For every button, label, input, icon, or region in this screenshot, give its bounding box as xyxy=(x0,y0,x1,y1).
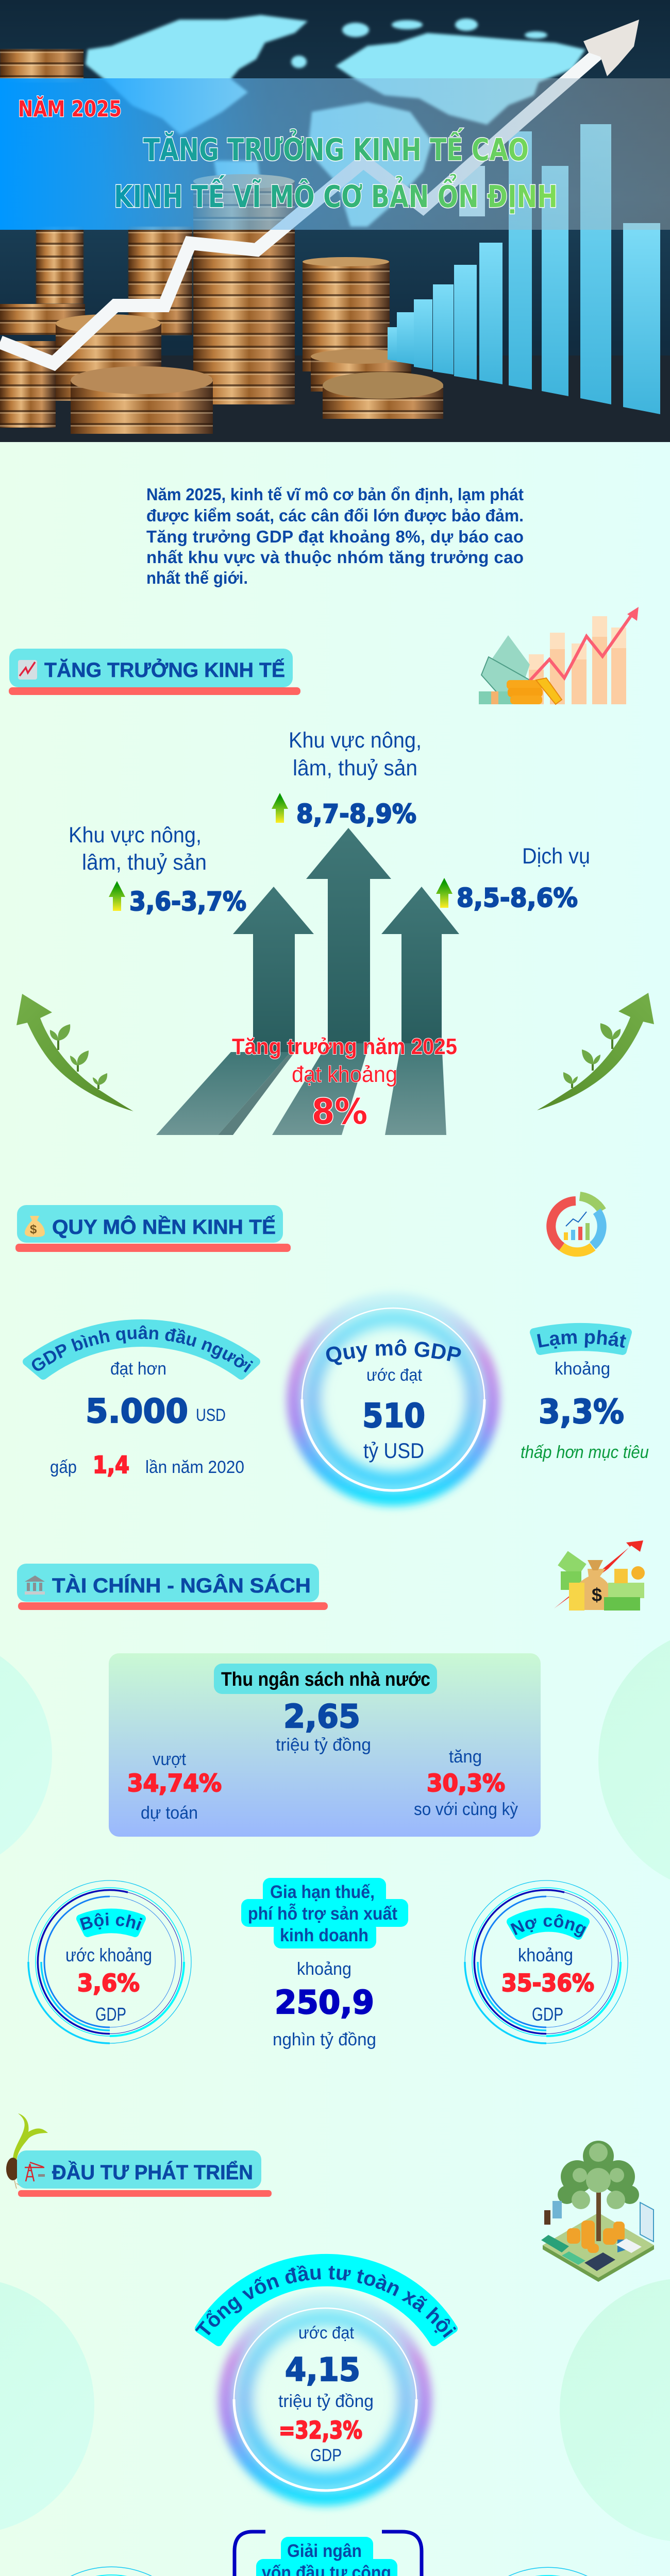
panel: public debt ring xyxy=(464,1880,628,2044)
icon: chart emoji xyxy=(18,660,37,680)
panel: state budget revenue: vượt xyxy=(153,1750,186,1769)
panel: total social investment: ước đạt xyxy=(298,2323,354,2342)
panel: state budget revenue: so với cùng kỳ xyxy=(414,1800,518,1819)
panel: state budget revenue: 2,65 xyxy=(283,1698,360,1735)
intro text: nhất khu vực và thuộc nhóm tăng trưởng cao xyxy=(146,548,524,567)
panel: GDP scale circle: ước đạt xyxy=(366,1365,422,1384)
label: left sector: lâm, thuỷ sản xyxy=(82,850,207,875)
panel: public investment disbursement xyxy=(234,2532,422,2576)
panel: public debt ring: GDP xyxy=(532,2004,563,2025)
growth 2025 callout: 8% xyxy=(312,1092,367,1132)
growth 2025 callout xyxy=(232,1034,457,1132)
panel: budget deficit ring xyxy=(27,1880,192,2044)
labels: agriculture, top arrow value xyxy=(289,728,422,781)
value: 8,5-8,6%: 8,5-8,6% xyxy=(457,883,578,913)
panel: budget deficit ring: GDP xyxy=(95,2004,126,2025)
panel: FDI attracted ring xyxy=(71,2567,152,2576)
growth 2025 callout: Tăng trưởng năm 2025 xyxy=(232,1034,457,1059)
intro text: Năm 2025, kinh tế vĩ mô cơ bản ổn định, lạm phát xyxy=(146,485,524,504)
intro text: nhất thế giới. xyxy=(146,568,248,587)
panel: budget deficit ring: Bội chi xyxy=(79,1912,142,1930)
panel: total social investment xyxy=(195,2253,458,2513)
hero image: coins, bars, world map and arrow xyxy=(0,0,670,442)
pill: budget title xyxy=(214,1664,437,1694)
panel: budget deficit ring: 3,6% xyxy=(77,1969,140,1997)
panel: total social investment: Tổng vốn đầu tư toàn xã hội xyxy=(195,2265,457,2338)
panel: GDP scale circle: 510 xyxy=(362,1397,425,1435)
decorative side shape: right xyxy=(560,2278,670,2542)
panel: state budget revenue xyxy=(109,1653,541,1837)
panel: GDP scale circle xyxy=(281,1291,506,1513)
illustration: money tree xyxy=(541,2141,654,2282)
value: 3,6-3,7% xyxy=(109,881,246,917)
icon: crane xyxy=(25,2162,45,2181)
panel: FDI realised ring xyxy=(508,2567,588,2576)
panel: GDP per capita: 5.000 xyxy=(86,1393,188,1431)
panel: tax deferral: nghìn tỷ đồng xyxy=(273,2030,376,2049)
section header: Tăng trưởng kinh tế: TĂNG TRƯỞNG KINH TẾ xyxy=(44,658,285,682)
intro text: Tăng trưởng GDP đạt khoảng 8%, dự báo cao xyxy=(146,527,524,546)
panel: state budget revenue: 30,3% xyxy=(427,1769,505,1797)
panel: GDP per capita: lần năm 2020 xyxy=(145,1458,244,1477)
value: 8,7-8,9%: 8,7-8,9% xyxy=(296,799,416,829)
hero title band xyxy=(0,78,670,230)
panel: total social investment: =32,3% xyxy=(279,2416,362,2444)
panel: tax deferral: phí hỗ trợ sản xuất xyxy=(248,1903,397,1924)
panel: state budget revenue: dự toán xyxy=(141,1803,198,1823)
panel: tax deferral: kinh doanh xyxy=(280,1925,368,1945)
intro text: được kiểm soát, các cân đối lớn được bảo đảm. xyxy=(146,506,524,525)
panel: public debt ring: 35-36% xyxy=(501,1969,594,1997)
year label: NĂM 2025 xyxy=(18,96,122,122)
rising arrow xyxy=(0,20,639,363)
intro text xyxy=(146,485,524,587)
panel: inflation: Lạm phát xyxy=(537,1330,626,1349)
panel: public debt ring: Nợ công xyxy=(510,1914,587,1937)
main title xyxy=(114,128,558,214)
icon: money bag: $ xyxy=(30,1223,37,1236)
growth 2025 callout: đạt khoảng xyxy=(292,1062,397,1087)
main title: TĂNG TRƯỞNG KINH TẾ CAO xyxy=(143,128,529,167)
section header: Tài chính - Ngân sách xyxy=(17,1564,328,1610)
icon: money bag with coins: $ xyxy=(592,1584,602,1605)
decorative side shape: left xyxy=(0,1635,52,1875)
coin stacks xyxy=(0,49,443,434)
panel: GDP per capita: 1,4 xyxy=(93,1451,129,1479)
pill: GDP bình quân xyxy=(27,1324,256,1376)
icon: donut chart xyxy=(551,1196,602,1252)
labels: agriculture, top arrow value: Khu vực nông, xyxy=(289,728,422,753)
labels: agriculture, top arrow value: lâm, thuỷ sản xyxy=(293,756,417,781)
label: left sector xyxy=(69,823,207,875)
panel: GDP per capita: gấp xyxy=(50,1458,77,1477)
panel: budget deficit ring: ước khoảng xyxy=(65,1944,152,1965)
icon: left green arrow xyxy=(16,994,133,1111)
panel: inflation: 3,3% xyxy=(539,1393,624,1431)
panel: GDP per capita xyxy=(23,1319,260,1479)
label: left sector: Khu vực nông, xyxy=(69,823,202,848)
decorative side shape: right xyxy=(598,1628,670,1892)
label: services: Dịch vụ xyxy=(522,844,590,869)
section header: Đầu tư phát triển: ĐẦU TƯ PHÁT TRIỂN xyxy=(52,2160,253,2184)
icon: bank xyxy=(25,1575,45,1595)
panel: state budget revenue: triệu tỷ đồng xyxy=(276,1735,371,1755)
three growth arrows xyxy=(156,828,459,1135)
panel: public debt ring: khoảng xyxy=(518,1944,573,1965)
panel: total social investment: 4,15 xyxy=(285,2351,360,2388)
value: 8,7-8,9% xyxy=(272,793,416,829)
decorative side shape: left xyxy=(0,2278,94,2534)
panel: GDP scale circle: tỷ USD xyxy=(363,1438,424,1463)
value: 3,6-3,7%: 3,6-3,7% xyxy=(129,887,246,917)
section header: Tài chính - Ngân sách: TÀI CHÍNH - NGÂN SÁCH xyxy=(52,1573,311,1597)
icon: sprout behind investment header xyxy=(6,2113,48,2189)
panel: inflation: khoảng xyxy=(555,1359,610,1379)
panel: state budget revenue: tăng xyxy=(449,1747,482,1767)
main title: KINH TẾ VĨ MÔ CƠ BẢN ỔN ĐỊNH xyxy=(114,174,558,214)
bars xyxy=(388,124,660,414)
panel: state budget revenue: 34,74% xyxy=(127,1769,222,1797)
panel: tax deferral: Gia hạn thuế, xyxy=(270,1882,375,1902)
icon: right green arrow xyxy=(537,993,654,1110)
panel: GDP per capita: GDP bình quân đầu người xyxy=(32,1325,254,1372)
panel: total social investment: triệu tỷ đồng xyxy=(278,2392,374,2411)
section header: Đầu tư phát triển xyxy=(17,2150,272,2197)
panel: GDP scale circle: Quy mô GDP xyxy=(326,1340,461,1365)
panel: public investment disbursement: Giải ngân xyxy=(287,2541,362,2561)
panel: tax deferral: 250,9 xyxy=(275,1984,374,2021)
icon: money bag xyxy=(25,1216,45,1237)
illustration: money and rising bars xyxy=(479,607,639,704)
section header: Quy mô nền kinh tế xyxy=(15,1205,291,1252)
icon: money bag with coins xyxy=(554,1540,645,1611)
panel: total social investment: GDP xyxy=(310,2446,342,2465)
panel: GDP per capita: đạt hơn xyxy=(110,1359,166,1379)
panel: tax deferral: khoảng xyxy=(297,1959,351,1979)
panel: state budget revenue: Thu ngân sách nhà nước xyxy=(221,1669,430,1690)
panel: GDP per capita: USD xyxy=(196,1405,226,1425)
section header: Tăng trưởng kinh tế xyxy=(9,649,300,695)
section header: Quy mô nền kinh tế: QUY MÔ NỀN KINH TẾ xyxy=(52,1215,276,1239)
panel: inflation: thấp hơn mục tiêu xyxy=(521,1443,649,1462)
panel: tax deferral xyxy=(241,1878,408,2049)
panel: inflation xyxy=(521,1323,649,1462)
